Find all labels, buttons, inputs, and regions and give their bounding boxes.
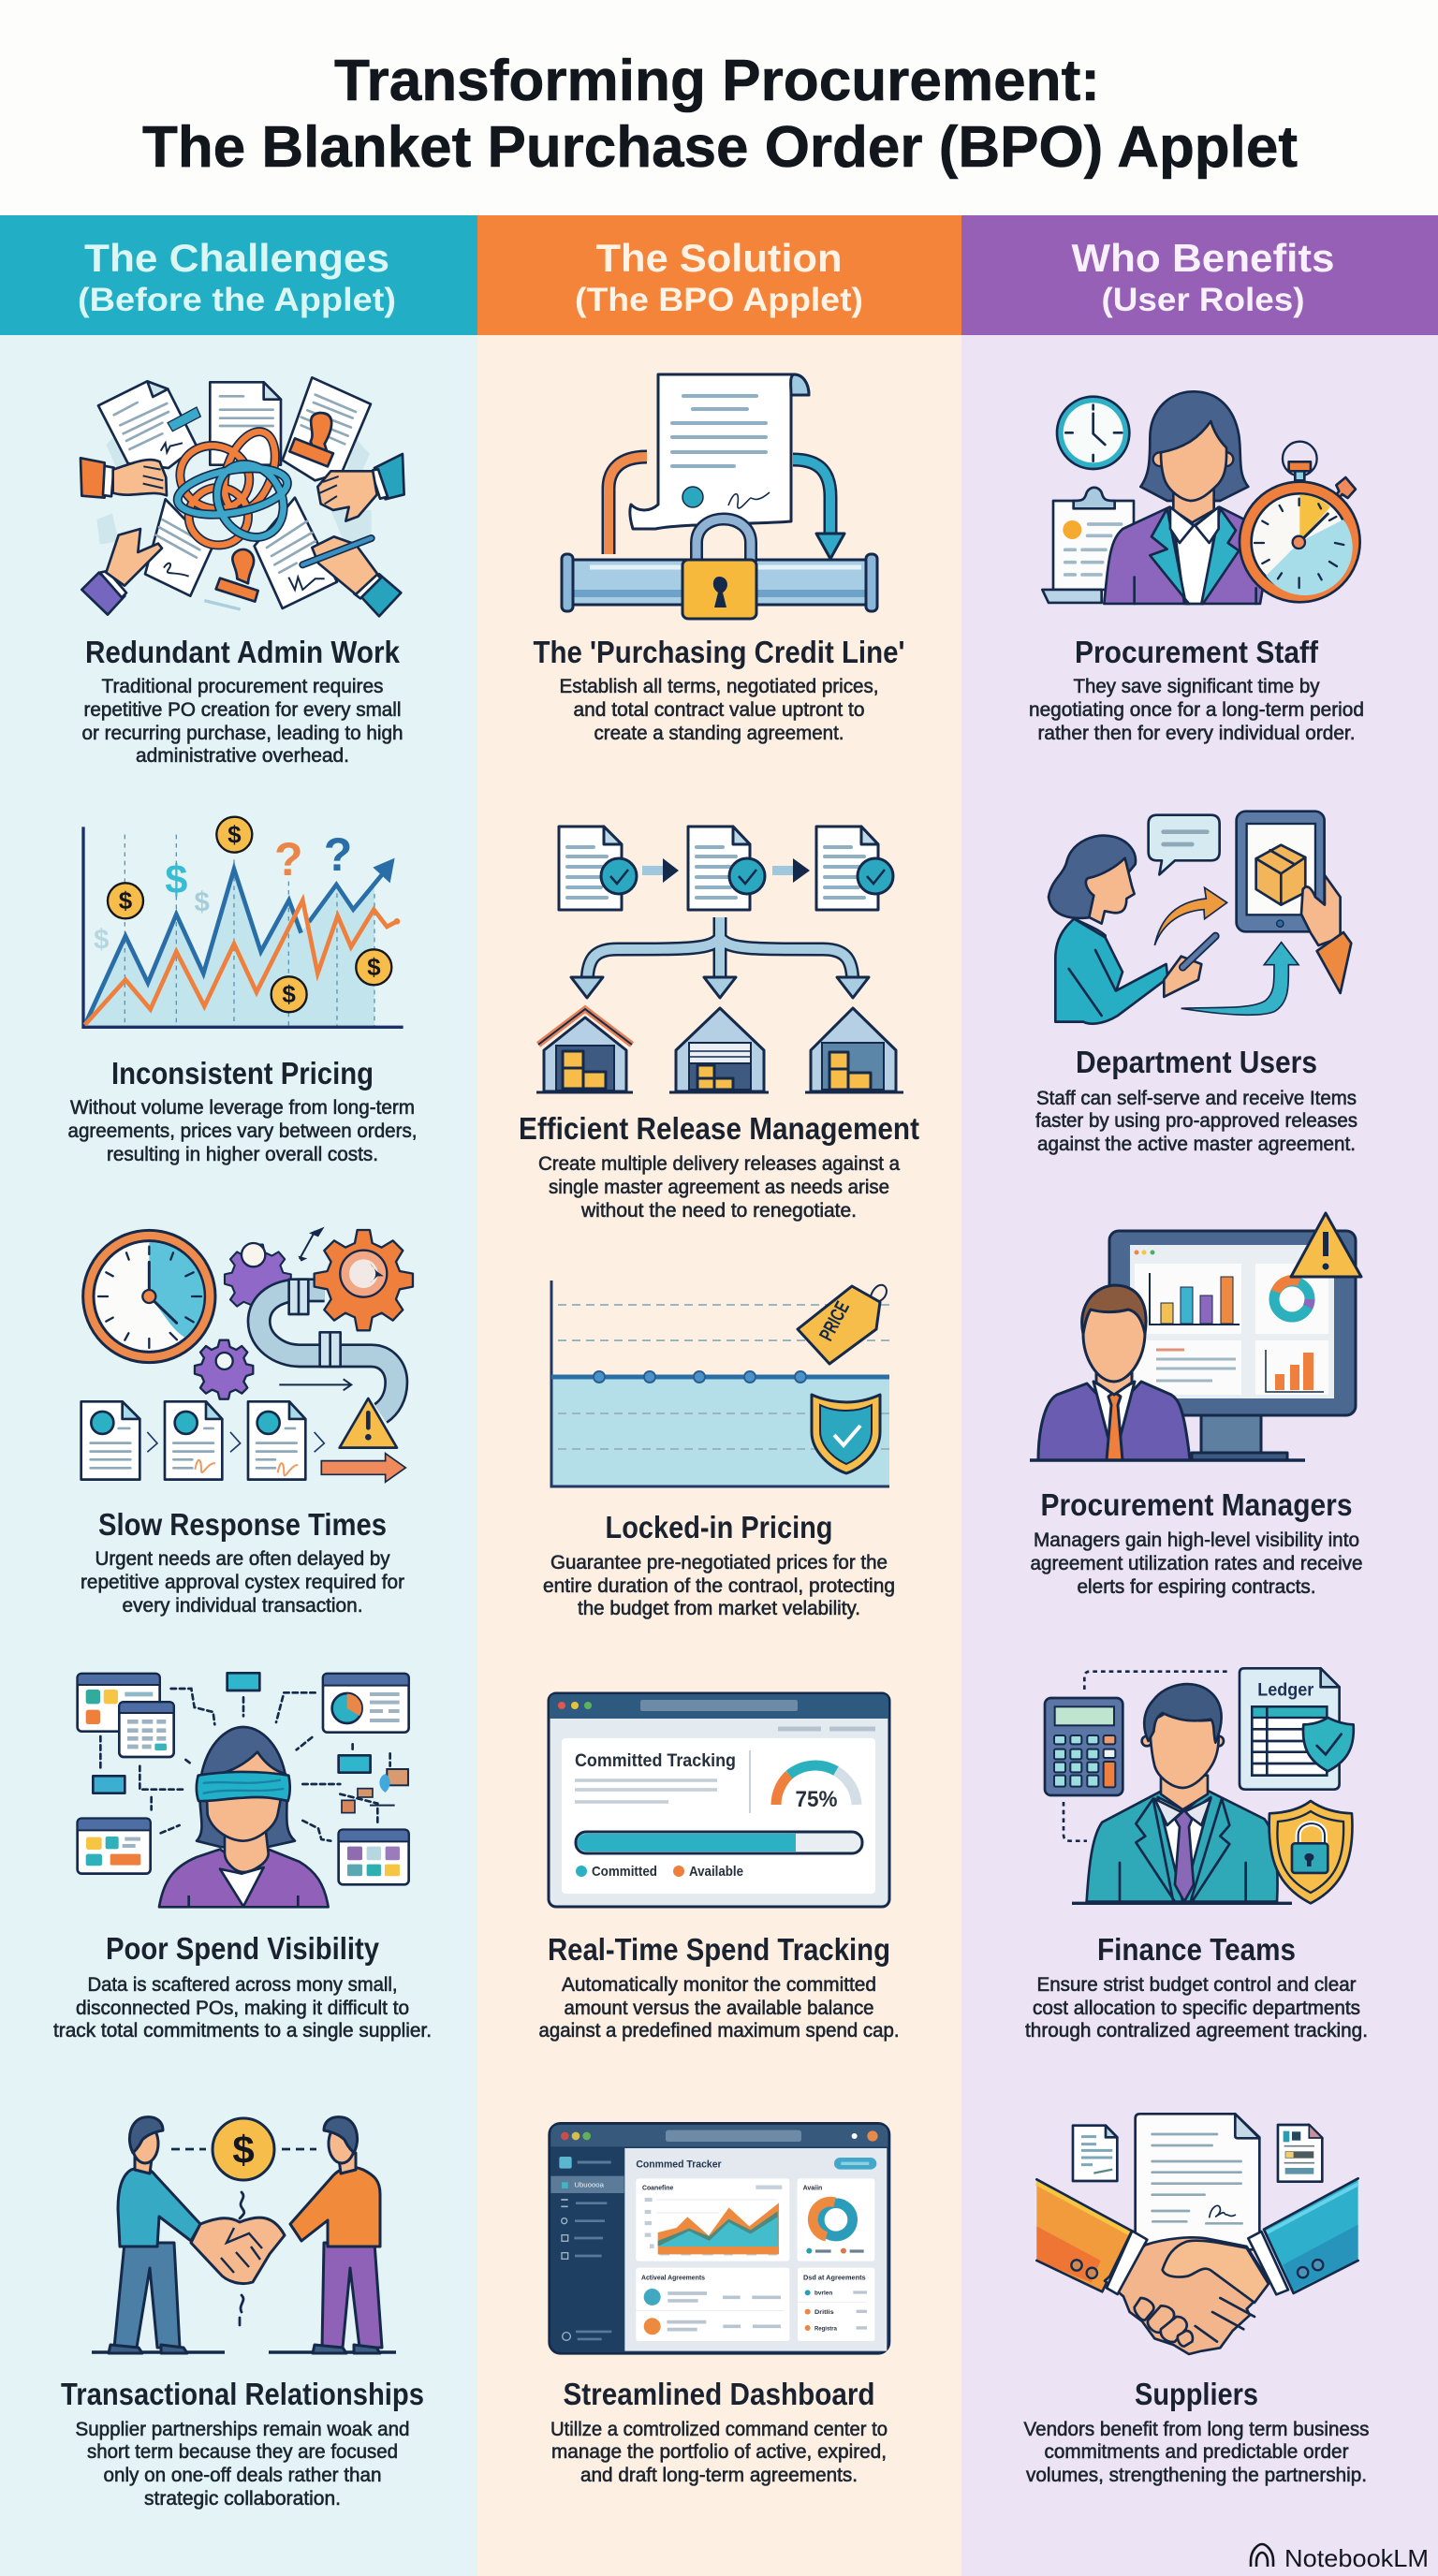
icon: committed tracking window — [549, 1693, 889, 1907]
panel: who benefits — [961, 215, 1438, 2576]
text block: suppliers — [1024, 2419, 1369, 2486]
text block: efficient release management: single master agreement as needs arise — [549, 1177, 889, 1198]
column header: who benefits: (User Roles) — [1101, 282, 1305, 318]
title — [142, 49, 1298, 180]
icon: locked-in pricing chart: PRICE — [815, 1298, 854, 1344]
text block: poor spend visibility: disconnected POs, making it difficult to — [76, 1998, 409, 2019]
text block: real-time spend tracking: amount versus the available balance — [564, 1998, 874, 2019]
icon: locked-in pricing chart — [551, 1281, 889, 1486]
text block: procurement staff: negotiating once for a long-term period — [1029, 699, 1364, 721]
text block: inconsistent pricing: agreements, prices vary between orders, — [67, 1120, 418, 1142]
icon: inconsistent pricing chart: $ — [94, 924, 109, 955]
text block: real-time spend tracking: against a predefined maximum spend cap. — [539, 2020, 899, 2042]
text block: redundant admin work: administrative overhead. — [136, 745, 349, 767]
text block: streamlined dashboard: manage the portfolio of active, expired, — [551, 2441, 887, 2463]
column header: the challenges: The Challenges — [84, 236, 389, 280]
text block: procurement managers: agreement utilization rates and receive — [1030, 1553, 1363, 1574]
text block: finance teams: Ensure strist budget control and clear — [1037, 1974, 1357, 1996]
icon: purchasing credit line contract and lock — [562, 374, 877, 619]
heading: suppliers: Suppliers — [1135, 2377, 1258, 2411]
icon: streamlined dashboard window: Ubuoooa — [574, 2183, 604, 2189]
icon: redundant admin work — [81, 377, 404, 616]
heading: procurement managers: Procurement Managers — [1041, 1487, 1352, 1522]
panel: the solution — [477, 215, 961, 2576]
text block: procurement managers: elerts for espiring contracts. — [1077, 1576, 1316, 1598]
text block: suppliers: volumes, strengthening the partnership. — [1026, 2465, 1367, 2486]
text block: procurement staff: They save significant time by — [1073, 676, 1320, 697]
text block: locked-in pricing: entire duration of the contraol, protecting — [543, 1575, 895, 1597]
icon: slow response clock, gears and pipe — [81, 1227, 413, 1482]
text block: streamlined dashboard — [550, 2419, 888, 2486]
text block: redundant admin work — [82, 676, 403, 767]
notebooklm logo: NotebookLM — [1284, 2544, 1429, 2572]
text block: procurement managers: Managers gain high-level visibility into — [1034, 1530, 1359, 1551]
icon: procurement staff with clock and stopwatch — [1042, 391, 1360, 604]
icon: committed tracking window: Committed Tracking — [575, 1751, 736, 1771]
text block: suppliers: Vendors benefit from long term business — [1024, 2419, 1369, 2440]
text block: inconsistent pricing — [67, 1097, 418, 1165]
title: Transforming Procurement: — [334, 49, 1100, 113]
text block: streamlined dashboard: and draft long-term agreements. — [580, 2465, 858, 2486]
title: The Blanket Purchase Order (BPO) Applet — [142, 115, 1298, 180]
column header: the solution: (The BPO Applet) — [575, 282, 863, 318]
text block: transactional relationships: Supplier partnerships remain woak and — [75, 2419, 410, 2440]
icon: streamlined dashboard window: Dsd at Agreements — [803, 2275, 866, 2281]
text block: transactional relationships — [75, 2419, 410, 2510]
heading: the purchasing credit line: The 'Purchasing Credit Line' — [534, 635, 904, 669]
panel: the challenges — [0, 215, 477, 2576]
text block: the purchasing credit line: Establish all terms, negotiated prices, — [560, 676, 878, 697]
text block: suppliers: commitments and predictable order — [1045, 2441, 1349, 2463]
text block: procurement staff — [1029, 676, 1364, 744]
heading: finance teams: Finance Teams — [1097, 1932, 1296, 1967]
text block: efficient release management — [538, 1153, 900, 1222]
heading: procurement staff: Procurement Staff — [1075, 635, 1319, 669]
text block: locked-in pricing: Guarantee pre-negotiated prices for the — [550, 1552, 888, 1573]
icon: finance team member with ledger and calculator — [1045, 1668, 1354, 1903]
icon: streamlined dashboard window: Dritlis — [814, 2309, 834, 2316]
text block: transactional relationships: strategic collaboration. — [144, 2488, 341, 2510]
text block: finance teams — [1025, 1974, 1368, 2042]
text block: inconsistent pricing: Without volume leverage from long-term — [70, 1097, 415, 1119]
icon: streamlined dashboard window: Conmmed Tracker — [636, 2159, 722, 2171]
heading: department users: Department Users — [1076, 1045, 1317, 1079]
text block: streamlined dashboard: Utillze a comtrolized command center to — [550, 2419, 888, 2440]
text block: locked-in pricing: the budget from market velability. — [578, 1598, 860, 1619]
text block: poor spend visibility: track total commitments to a single supplier. — [53, 2020, 432, 2042]
icon: streamlined dashboard window: bvrlen — [814, 2290, 832, 2296]
text block: department users: against the active master agreement. — [1037, 1134, 1356, 1155]
heading: streamlined dashboard: Streamlined Dashboard — [564, 2377, 874, 2411]
heading: slow response times: Slow Response Times — [98, 1507, 387, 1542]
text block: inconsistent pricing: resulting in higher overall costs. — [107, 1144, 378, 1165]
text block: department users: Staff can self-serve and receive Items — [1036, 1088, 1357, 1109]
icon: inconsistent pricing chart: $ — [165, 857, 187, 902]
icon: transactional handshake — [92, 2117, 396, 2353]
column header: the challenges: (Before the Applet) — [78, 282, 396, 318]
text block: procurement staff: rather then for every individual order. — [1037, 723, 1356, 744]
column header: the solution — [477, 215, 961, 335]
icon: inconsistent pricing chart: $ — [194, 887, 210, 918]
icon: department user with tablet — [1049, 812, 1351, 1024]
heading: transactional relationships: Transactional Relationships — [61, 2377, 424, 2411]
text block: poor spend visibility: Data is scaftered across mony small, — [88, 1974, 397, 1996]
icon: streamlined dashboard window: Coanefine — [642, 2183, 673, 2191]
icon: finance team member with ledger and calculator: Ledger — [1257, 1681, 1314, 1701]
text block: finance teams: through contralized agreement tracking. — [1025, 2020, 1368, 2042]
icon: committed tracking window: Committed — [592, 1864, 657, 1880]
icon: suppliers handshake and agreement — [1036, 2114, 1358, 2354]
text block: the purchasing credit line — [560, 676, 878, 744]
icon: inconsistent pricing chart: ? — [324, 828, 352, 881]
icon: transactional handshake: $ — [232, 2128, 255, 2172]
icon: committed tracking window: Available — [689, 1864, 743, 1880]
text block: slow response times — [81, 1548, 404, 1617]
heading: efficient release management: Efficient Release Management — [519, 1111, 919, 1146]
icon: inconsistent pricing chart: ? — [274, 833, 303, 886]
text block: department users — [1035, 1088, 1357, 1155]
heading: poor spend visibility: Poor Spend Visibility — [106, 1931, 380, 1966]
text block: slow response times: repetitive approval cystex required for — [81, 1572, 404, 1593]
text block: real-time spend tracking: Automatically monitor the committed — [562, 1974, 876, 1996]
icon: release management flow — [536, 827, 903, 1092]
icon: inconsistent pricing chart — [83, 817, 404, 1027]
icon: streamlined dashboard window — [550, 2123, 889, 2353]
icon: committed tracking window: 75% — [796, 1787, 837, 1812]
icon: procurement manager with monitor — [1030, 1213, 1361, 1460]
text block: real-time spend tracking — [539, 1974, 899, 2042]
text block: efficient release management: without the need to renegotiate. — [580, 1200, 857, 1222]
icon: inconsistent pricing chart: $ — [367, 953, 381, 981]
heading: real-time spend tracking: Real-Time Spend Tracking — [548, 1932, 890, 1967]
text block: the purchasing credit line: and total contract value uptront to — [573, 699, 865, 721]
text block: redundant admin work: repetitive PO creation for every small — [84, 699, 401, 721]
icon: streamlined dashboard window: Avaiin — [803, 2183, 823, 2191]
text block: transactional relationships: only on one-off deals rather than — [103, 2465, 382, 2486]
icon: poor spend visibility blindfold — [78, 1673, 409, 1907]
column header: who benefits — [961, 215, 1438, 335]
icon: inconsistent pricing chart: $ — [282, 980, 296, 1008]
text block: redundant admin work: Traditional procurement requires — [101, 676, 384, 697]
heading: redundant admin work: Redundant Admin Work — [85, 635, 401, 669]
heading: locked-in pricing: Locked-in Pricing — [605, 1510, 833, 1544]
text block: the purchasing credit line: create a standing agreement. — [594, 723, 844, 744]
text block: procurement managers — [1030, 1530, 1363, 1598]
column header: the solution: The Solution — [595, 236, 843, 280]
text block: department users: faster by using pro-approved releases — [1035, 1110, 1357, 1132]
icon: streamlined dashboard window: Registra — [814, 2325, 837, 2332]
icon: inconsistent pricing chart: $ — [119, 886, 133, 915]
column header: the challenges — [0, 215, 477, 335]
text block: efficient release management: Create multiple delivery releases against a — [538, 1153, 900, 1175]
text block: slow response times: Urgent needs are often delayed by — [95, 1548, 390, 1570]
icon: streamlined dashboard window: Activeal Agreements — [641, 2275, 705, 2281]
text block: transactional relationships: short term because they are focused — [87, 2441, 398, 2463]
text block: poor spend visibility — [53, 1974, 432, 2042]
text block: slow response times: every individual transaction. — [122, 1595, 363, 1617]
heading: inconsistent pricing: Inconsistent Pricing — [111, 1056, 374, 1090]
text block: redundant admin work: or recurring purchase, leading to high — [82, 723, 403, 744]
icon: inconsistent pricing chart: $ — [227, 820, 242, 848]
column header: who benefits: Who Benefits — [1071, 236, 1335, 280]
text block: locked-in pricing — [543, 1552, 895, 1619]
text block: finance teams: cost allocation to specific departments — [1033, 1998, 1360, 2019]
